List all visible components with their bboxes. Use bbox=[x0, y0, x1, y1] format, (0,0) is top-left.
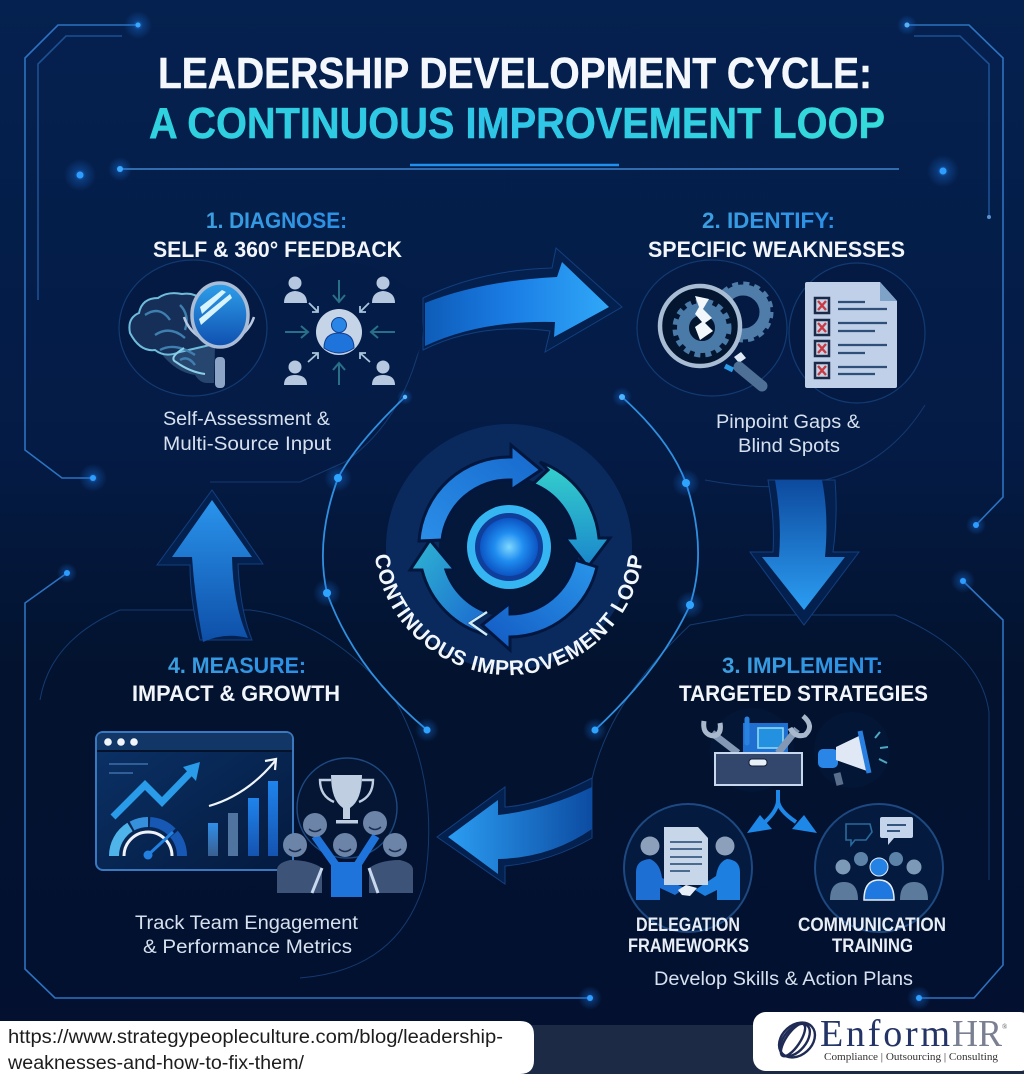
icon backdrop bbox=[637, 260, 925, 403]
heading: 2. IDENTIFY: bbox=[702, 208, 835, 233]
disc bbox=[386, 424, 632, 670]
panel: implement bbox=[624, 653, 946, 990]
hub bbox=[439, 477, 579, 617]
logo rings bbox=[772, 1015, 822, 1065]
icon: communication bbox=[815, 804, 943, 932]
text: labels: DELEGATION bbox=[636, 915, 740, 936]
logo: EnformHR: Compliance | Outsourcing | Consulting bbox=[824, 1051, 998, 1063]
arrow: diagnose to identify bbox=[423, 248, 622, 352]
logo: EnformHR bbox=[753, 1012, 1024, 1071]
icon: forking arrows bbox=[747, 790, 817, 833]
text: develop skills: Develop Skills & Action Plans bbox=[654, 969, 913, 990]
text: labels: FRAMEWORKS bbox=[628, 936, 749, 957]
heading: 4. MEASURE: bbox=[168, 653, 306, 678]
text: track team: Track Team Engagement bbox=[135, 913, 359, 934]
heading bbox=[679, 653, 928, 706]
logo: EnformHR: HR bbox=[952, 1013, 1003, 1055]
arrow: implement to measure bbox=[437, 778, 592, 884]
text: labels: TRAINING bbox=[832, 936, 913, 957]
text: track team: & Performance Metrics bbox=[143, 937, 352, 958]
icon: toolbox bbox=[704, 708, 810, 792]
icon: checklist document bbox=[805, 282, 897, 388]
panel: measure bbox=[96, 653, 413, 958]
source url box bbox=[0, 1021, 534, 1074]
icon: magnifier over broken gears bbox=[660, 284, 771, 386]
heading: SPECIFIC WEAKNESSES bbox=[648, 237, 905, 262]
text: pinpoint gaps bbox=[716, 412, 860, 457]
panel: identify bbox=[637, 208, 925, 457]
title bbox=[149, 49, 885, 148]
icon backdrop bbox=[119, 260, 423, 398]
source url box: weaknesses-and-how-to-fix-them/ bbox=[7, 1053, 305, 1074]
heading bbox=[648, 208, 905, 262]
footer strip bbox=[0, 1025, 1024, 1074]
heading: 3. IMPLEMENT: bbox=[722, 653, 883, 678]
central loop curves bbox=[313, 387, 704, 742]
icon: dashboard window bbox=[96, 732, 293, 870]
text: labels: COMMUNICATION bbox=[798, 915, 946, 936]
heading bbox=[153, 208, 402, 262]
arrow: measure to diagnose bbox=[157, 490, 263, 642]
source url box: https://www.strategypeopleculture.com/blog/leadership- bbox=[8, 1027, 503, 1048]
text: track team bbox=[135, 913, 359, 958]
icon: team with trophy bbox=[277, 775, 413, 893]
icon: megaphone bbox=[814, 712, 890, 788]
text: labels bbox=[628, 915, 946, 957]
icon: multi-source people bbox=[284, 276, 395, 385]
icon: delegation bbox=[624, 804, 752, 932]
heading: TARGETED STRATEGIES bbox=[679, 681, 928, 706]
text: pinpoint gaps: Blind Spots bbox=[738, 436, 840, 457]
title: A CONTINUOUS IMPROVEMENT LOOP bbox=[149, 99, 885, 148]
cycle arrows bbox=[410, 445, 610, 650]
logo: EnformHR: ® bbox=[1002, 1023, 1008, 1031]
logo: EnformHR: Enform bbox=[820, 1013, 950, 1055]
heading bbox=[132, 653, 340, 706]
text: self-assessment: Multi-Source Input bbox=[163, 434, 332, 455]
heading: IMPACT & GROWTH bbox=[132, 681, 340, 706]
arrow: identify to implement bbox=[750, 480, 859, 625]
icon: trophy backdrop bbox=[297, 758, 397, 858]
text: pinpoint gaps: Pinpoint Gaps & bbox=[716, 412, 860, 433]
text: self-assessment: Self-Assessment & bbox=[163, 409, 330, 430]
icon: brain with magnifier bbox=[129, 283, 254, 388]
heading: 1. DIAGNOSE: bbox=[206, 208, 347, 233]
loop label: CONTINUOUS IMPROVEMENT LOOP bbox=[376, 554, 642, 676]
title: LEADERSHIP DEVELOPMENT CYCLE: bbox=[158, 49, 872, 98]
central cycle bbox=[376, 424, 642, 676]
panel: diagnose bbox=[119, 208, 423, 455]
heading: SELF & 360° FEEDBACK bbox=[153, 237, 402, 262]
text: self-assessment bbox=[163, 409, 332, 455]
